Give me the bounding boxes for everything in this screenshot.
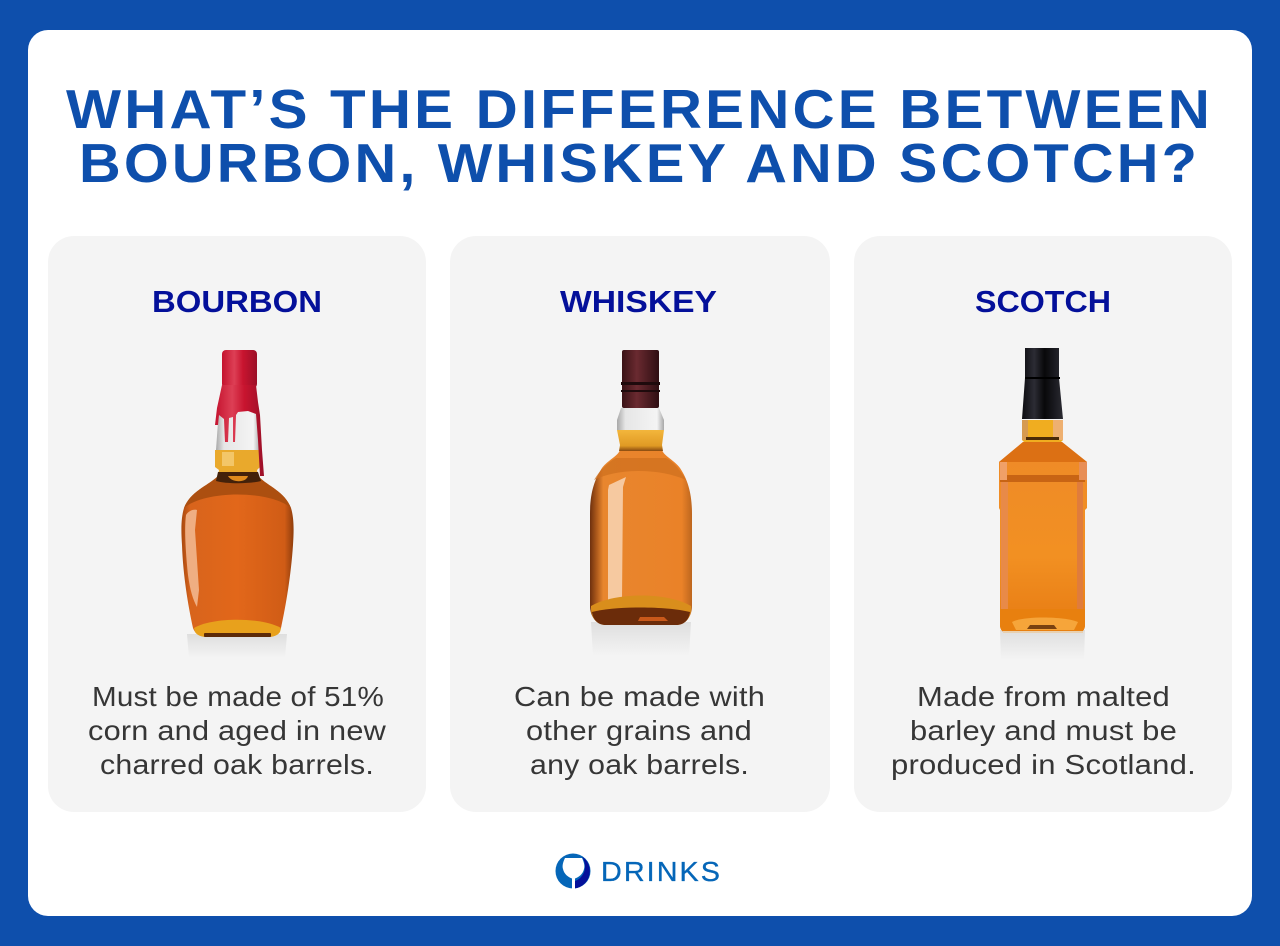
body text: whiskey: any oak barrels. — [530, 749, 749, 780]
icon: scotch bottle — [999, 348, 1087, 660]
heading: bourbon: BOURBON — [152, 285, 322, 319]
body text: bourbon — [88, 681, 386, 780]
logo: drinks — [556, 854, 722, 888]
panel: whiskey — [450, 236, 830, 812]
body text: whiskey: Can be made with — [514, 681, 765, 712]
title: BOURBON, WHISKEY AND SCOTCH? — [79, 132, 1200, 194]
body text: scotch: Made from malted — [917, 681, 1170, 712]
body text: scotch: produced in Scotland. — [891, 749, 1196, 780]
body text: whiskey — [514, 681, 765, 780]
panel: bourbon — [48, 236, 426, 812]
panel: scotch — [854, 236, 1232, 812]
title: WHAT’S THE DIFFERENCE BETWEEN — [66, 78, 1213, 140]
body text: bourbon: charred oak barrels. — [100, 749, 374, 780]
body text: scotch: barley and must be — [910, 715, 1177, 746]
body text: whiskey: other grains and — [526, 715, 752, 746]
heading: whiskey: WHISKEY — [560, 285, 717, 319]
title — [66, 78, 1213, 194]
icon: whiskey bottle — [590, 350, 692, 656]
body text: bourbon: corn and aged in new — [88, 715, 386, 746]
body text: bourbon: Must be made of 51% — [92, 681, 384, 712]
icon: bourbon bottle — [181, 350, 294, 658]
body text: scotch — [891, 681, 1196, 780]
heading: scotch: SCOTCH — [975, 285, 1111, 319]
wordmark: DRINKS — [601, 856, 722, 887]
icon: wine glass logo mark — [556, 854, 590, 888]
